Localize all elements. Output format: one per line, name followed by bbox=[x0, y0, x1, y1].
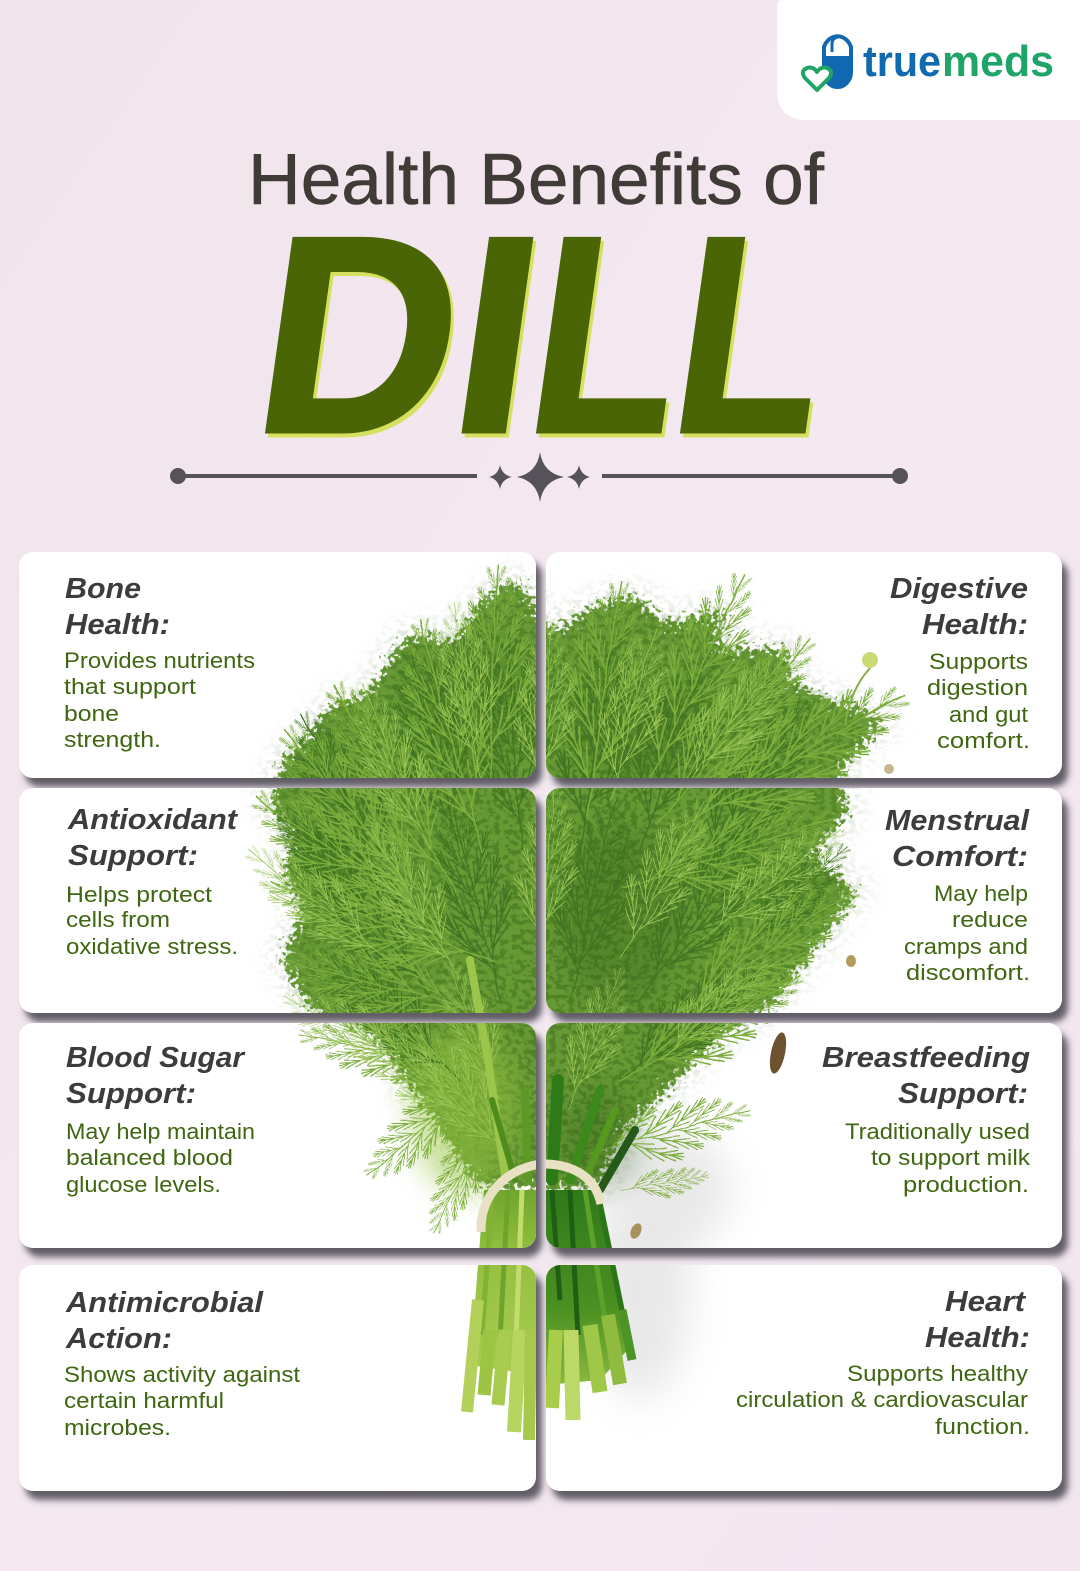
title: DILL: I bbox=[440, 182, 561, 495]
panel: breastfeeding support: Breastfeeding bbox=[822, 1042, 1030, 1074]
frond mass bbox=[258, 575, 895, 1190]
logo wordmark: true bbox=[863, 37, 941, 86]
panel: antioxidant support: oxidative stress. bbox=[66, 934, 238, 959]
panel: menstrual comfort: reduce bbox=[952, 907, 1028, 932]
title: DILL: I bbox=[437, 178, 558, 491]
stems above the tie bbox=[470, 960, 635, 1190]
panel: heart health: circulation & cardiovascular bbox=[736, 1387, 1029, 1412]
lighter lower foliage bbox=[410, 1025, 520, 1195]
panel: digestive health: Supports bbox=[929, 649, 1028, 674]
title: DILL: L bbox=[517, 183, 706, 495]
stems below the tie bbox=[467, 1190, 632, 1440]
panel: breastfeeding support bbox=[546, 1023, 1062, 1248]
panel: menstrual comfort: Menstrual bbox=[885, 805, 1030, 837]
panel: digestive health bbox=[546, 552, 1062, 778]
panel: menstrual comfort: discomfort. bbox=[906, 960, 1030, 985]
panel: blood sugar support: May help maintain bbox=[66, 1119, 255, 1144]
title: Health Benefits of: Health Benefits of bbox=[248, 140, 825, 220]
panel: blood sugar support: Blood Sugar bbox=[66, 1042, 246, 1074]
panel: heart health: Heart bbox=[945, 1286, 1026, 1318]
logo wordmark: meds bbox=[942, 37, 1054, 86]
title: DILL: L bbox=[514, 179, 703, 491]
panel: bone health: bone bbox=[64, 701, 119, 726]
panel: antimicrobial action bbox=[19, 1265, 536, 1491]
icon: capsule with heart bbox=[803, 36, 851, 90]
panel: menstrual comfort: cramps and bbox=[904, 934, 1028, 959]
panel: antioxidant support: Antioxidant bbox=[67, 804, 238, 836]
dill bunch photo illustration bbox=[225, 553, 933, 1440]
title: DILL: D bbox=[241, 178, 481, 491]
panel: bone health bbox=[19, 552, 536, 778]
panel: antioxidant support: cells from bbox=[66, 907, 170, 932]
panel: breastfeeding support: to support milk bbox=[871, 1145, 1031, 1170]
panel: menstrual comfort: Comfort: bbox=[892, 841, 1028, 873]
panel: menstrual comfort: May help bbox=[934, 881, 1028, 906]
panel: digestive health: comfort. bbox=[937, 728, 1030, 753]
panel: antioxidant support: Support: bbox=[68, 840, 198, 872]
panel: bone health: Health: bbox=[65, 609, 170, 641]
panel: heart health: Supports healthy bbox=[847, 1361, 1029, 1386]
panel: bone health: Bone bbox=[65, 573, 141, 605]
panel: bone health: Provides nutrients bbox=[64, 648, 255, 673]
panel: antimicrobial action: Shows activity against bbox=[64, 1362, 301, 1387]
panel: antimicrobial action: Antimicrobial bbox=[65, 1287, 264, 1319]
twine tie bbox=[481, 1164, 601, 1232]
panel: heart health bbox=[546, 1265, 1062, 1491]
panel: digestive health: and gut bbox=[949, 702, 1029, 727]
panel: digestive health: Health: bbox=[922, 609, 1028, 641]
panel: blood sugar support: Support: bbox=[66, 1078, 196, 1110]
soft table shadow bbox=[590, 1130, 730, 1400]
panel: antimicrobial action: Action: bbox=[65, 1323, 172, 1355]
stem bundle base right bbox=[546, 1190, 632, 1385]
panel: bone health: strength. bbox=[64, 727, 161, 752]
panel: bone health: that support bbox=[64, 674, 197, 699]
dark depth patches bbox=[425, 640, 710, 1190]
panel: heart health: function. bbox=[935, 1414, 1030, 1439]
panel: menstrual comfort bbox=[546, 788, 1062, 1013]
panel: antimicrobial action: certain harmful bbox=[64, 1388, 224, 1413]
divider with sparkles bbox=[170, 452, 908, 502]
title: DILL: L bbox=[661, 183, 850, 495]
title: DILL bbox=[241, 178, 850, 495]
logo wordmark bbox=[863, 37, 1054, 86]
panel: heart health: Health: bbox=[925, 1322, 1030, 1354]
logo panel bbox=[777, 0, 1080, 120]
seeds and flower bbox=[628, 652, 894, 1240]
panel: digestive health: Digestive bbox=[890, 573, 1028, 605]
fronds bbox=[225, 553, 933, 1244]
panel: breastfeeding support: Traditionally used bbox=[845, 1119, 1030, 1144]
panel: digestive health: digestion bbox=[927, 675, 1028, 700]
panel: breastfeeding support: Support: bbox=[898, 1078, 1028, 1110]
panel: antioxidant support: Helps protect bbox=[66, 882, 213, 907]
panel: blood sugar support: balanced blood bbox=[66, 1145, 233, 1170]
panel: blood sugar support: glucose levels. bbox=[66, 1172, 221, 1197]
panel: antioxidant support bbox=[19, 788, 536, 1013]
panel: breastfeeding support: production. bbox=[903, 1172, 1029, 1197]
frond texture bbox=[258, 575, 895, 1190]
panel: antimicrobial action: microbes. bbox=[64, 1415, 171, 1440]
stem bundle base bbox=[470, 1190, 536, 1375]
title: DILL: D bbox=[244, 182, 484, 495]
panel: blood sugar support bbox=[19, 1023, 536, 1248]
title: DILL: L bbox=[658, 179, 847, 491]
